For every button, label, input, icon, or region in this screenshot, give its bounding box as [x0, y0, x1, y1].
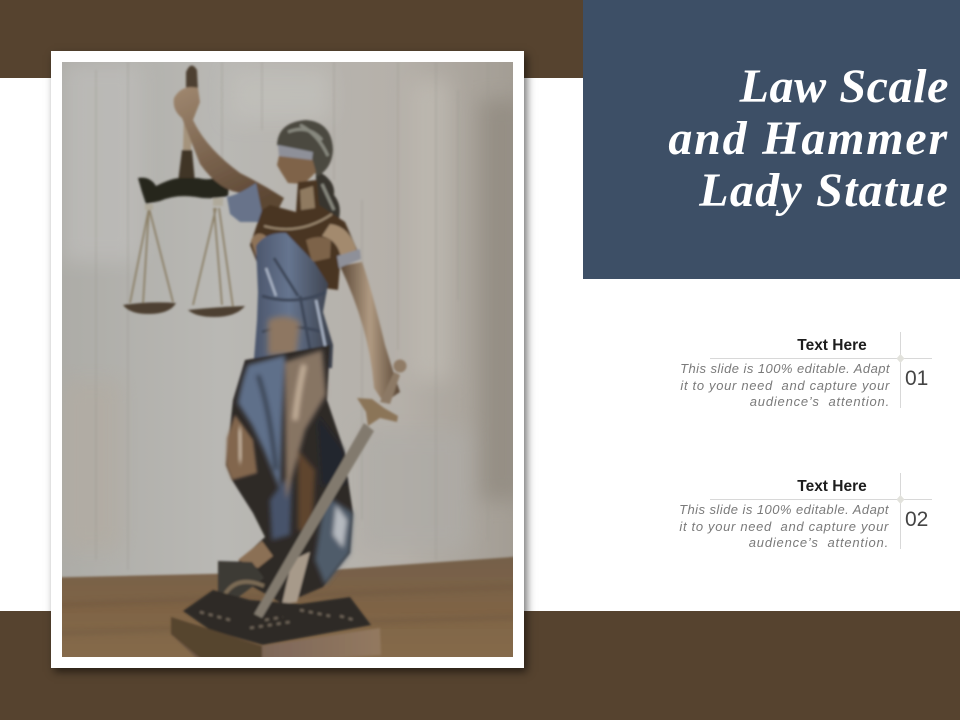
rocky base [183, 590, 371, 645]
scale chains [130, 208, 233, 307]
item 02 body text: audience’s attention. [749, 535, 889, 550]
feet [238, 541, 273, 568]
wooden table [30, 555, 540, 690]
item 01 body text [680, 361, 890, 409]
item 01 divider lines [710, 332, 932, 408]
item 01 number: 01 [905, 367, 928, 390]
item 01 body text: This slide is 100% editable. Adapt [680, 361, 890, 376]
blue sleeve [227, 183, 264, 222]
title: Law Scale [740, 60, 949, 113]
bronze waist [268, 316, 300, 355]
item 02 number: 02 [905, 508, 928, 531]
hair [277, 120, 333, 176]
item 02 body text: it to your need and capture your [679, 518, 889, 534]
statue [123, 65, 406, 662]
sword handle [380, 372, 400, 404]
scale crossbar [138, 173, 230, 204]
sword blade [254, 423, 374, 618]
item 01 heading: Text Here [797, 337, 867, 354]
title panel [583, 0, 960, 279]
top brown band [0, 0, 583, 78]
text item 01 [680, 332, 932, 409]
sword pommel [394, 360, 406, 372]
face [277, 156, 316, 184]
blindfold [278, 145, 313, 160]
tablet and snake [218, 561, 264, 602]
bare thigh [226, 415, 257, 480]
plinth [171, 617, 381, 662]
text item 02 [679, 473, 932, 550]
skirt and legs [226, 345, 353, 604]
photo: lady justice statue [62, 62, 513, 657]
item 02 heading: Text Here [797, 478, 867, 495]
item 01 body text: audience’s attention. [750, 394, 890, 409]
scale rod [186, 65, 198, 90]
upper drape [253, 233, 333, 372]
title: and Hammer [668, 112, 949, 165]
item 02 body text: This slide is 100% editable. Adapt [679, 502, 889, 517]
sword guard [357, 398, 398, 426]
item 02 divider lines [710, 473, 932, 549]
title: Lady Statue [699, 164, 949, 217]
title [668, 60, 949, 217]
neck and chest [250, 180, 358, 290]
lowered arm [340, 262, 400, 403]
item 02 body text [679, 502, 889, 550]
skirt folds [238, 350, 353, 585]
wall background [62, 62, 523, 582]
bottom brown band [0, 611, 960, 720]
scale pans [123, 302, 245, 317]
item 01 body text: it to your need and capture your [680, 378, 890, 392]
raised arm and hand [174, 87, 284, 222]
back hair [316, 170, 340, 220]
photo frame [51, 51, 524, 668]
